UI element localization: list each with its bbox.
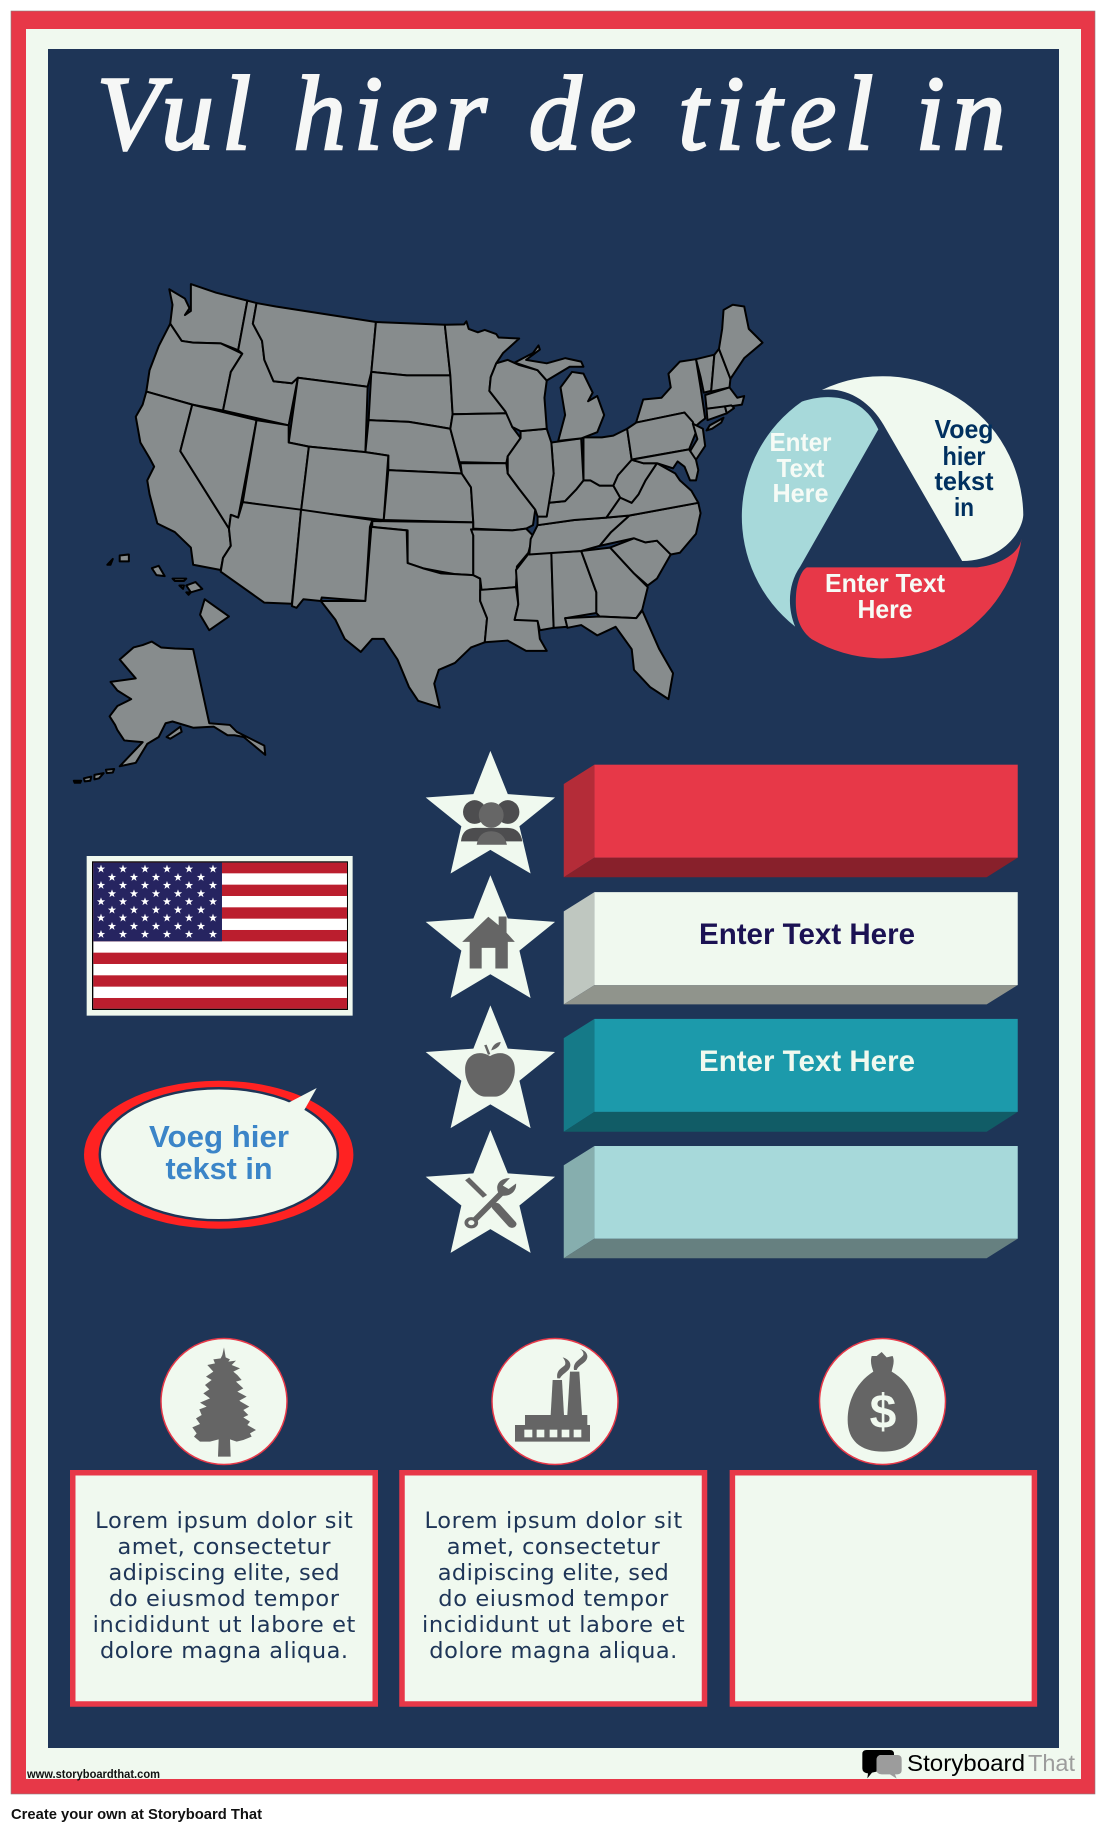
icon: apple star (426, 1005, 555, 1128)
pie label: blue segment: Enter (770, 427, 832, 457)
pie label: red segment (825, 568, 945, 624)
bar: teal (564, 1019, 1018, 1132)
pie label: cream segment: in (954, 492, 974, 522)
pie chart with three segments (742, 376, 1023, 658)
logo (862, 1750, 1076, 1779)
website url: www.storyboardthat.com (26, 1767, 160, 1781)
footer credit: Create your own at Storyboard That (11, 1806, 262, 1823)
bar text: cream bar: Enter Text Here (699, 918, 915, 951)
text box 2: amet, consectetur (447, 1534, 661, 1560)
text box 1 (73, 1473, 375, 1704)
pie label: blue segment (770, 427, 832, 508)
text box 2: do eiusmod tempor (438, 1586, 669, 1612)
pie label: cream segment (934, 414, 994, 522)
text box 2: dolore magna aliqua. (429, 1638, 677, 1664)
logo: Storyboard (907, 1750, 1025, 1776)
icon: people star (426, 751, 555, 874)
logo: That (1028, 1750, 1076, 1776)
3D bars (564, 765, 1018, 1258)
bar: cream (564, 892, 1018, 1004)
text box 1: adipiscing elite, sed (108, 1560, 340, 1586)
text box 2: incididunt ut labore et (422, 1612, 685, 1638)
bubble text: Voeg hier (149, 1119, 289, 1154)
text box 1: dolore magna aliqua. (100, 1638, 348, 1664)
icon circle: factory (492, 1338, 618, 1464)
bar: red (564, 765, 1018, 877)
bar text: teal bar: Enter Text Here (699, 1045, 915, 1078)
segment: red (796, 539, 1022, 658)
pie label: blue segment: Text (776, 453, 825, 483)
text box 2 (402, 1473, 704, 1704)
icon circle: tree (161, 1338, 287, 1464)
icon circle: money bag: $ (870, 1386, 897, 1439)
US flag (87, 856, 353, 1016)
speech bubble (84, 1081, 353, 1229)
bubble text: tekst in (166, 1151, 272, 1186)
pie label: cream segment: tekst (934, 466, 994, 496)
segment: cream (822, 376, 1023, 561)
text box 2: adipiscing elite, sed (438, 1560, 669, 1586)
text box 3 (732, 1473, 1034, 1704)
title: Vul hier de titel in (96, 55, 1006, 172)
text box 1: Lorem ipsum dolor sit (95, 1508, 353, 1534)
text box 2: Lorem ipsum dolor sit (424, 1508, 682, 1534)
text box 1: do eiusmod tempor (109, 1586, 340, 1612)
pie label: blue segment: Here (772, 478, 828, 508)
text box 1: amet, consectetur (118, 1534, 331, 1560)
stars with icons (426, 751, 555, 1253)
icon: house star (426, 875, 555, 998)
pie label: red segment: Enter Text (825, 568, 945, 598)
icon circle: money bag (820, 1338, 946, 1464)
segment: light blue (742, 397, 878, 627)
pie label: red segment: Here (858, 594, 912, 624)
bubble text (149, 1119, 289, 1186)
bar: light blue (564, 1146, 1018, 1258)
icon: tools star (426, 1130, 555, 1253)
pie label: cream segment: Voeg (934, 414, 994, 444)
pie label: cream segment: hier (942, 441, 986, 471)
map of the United States (74, 284, 763, 783)
text box 1: incididunt ut labore et (93, 1612, 356, 1638)
